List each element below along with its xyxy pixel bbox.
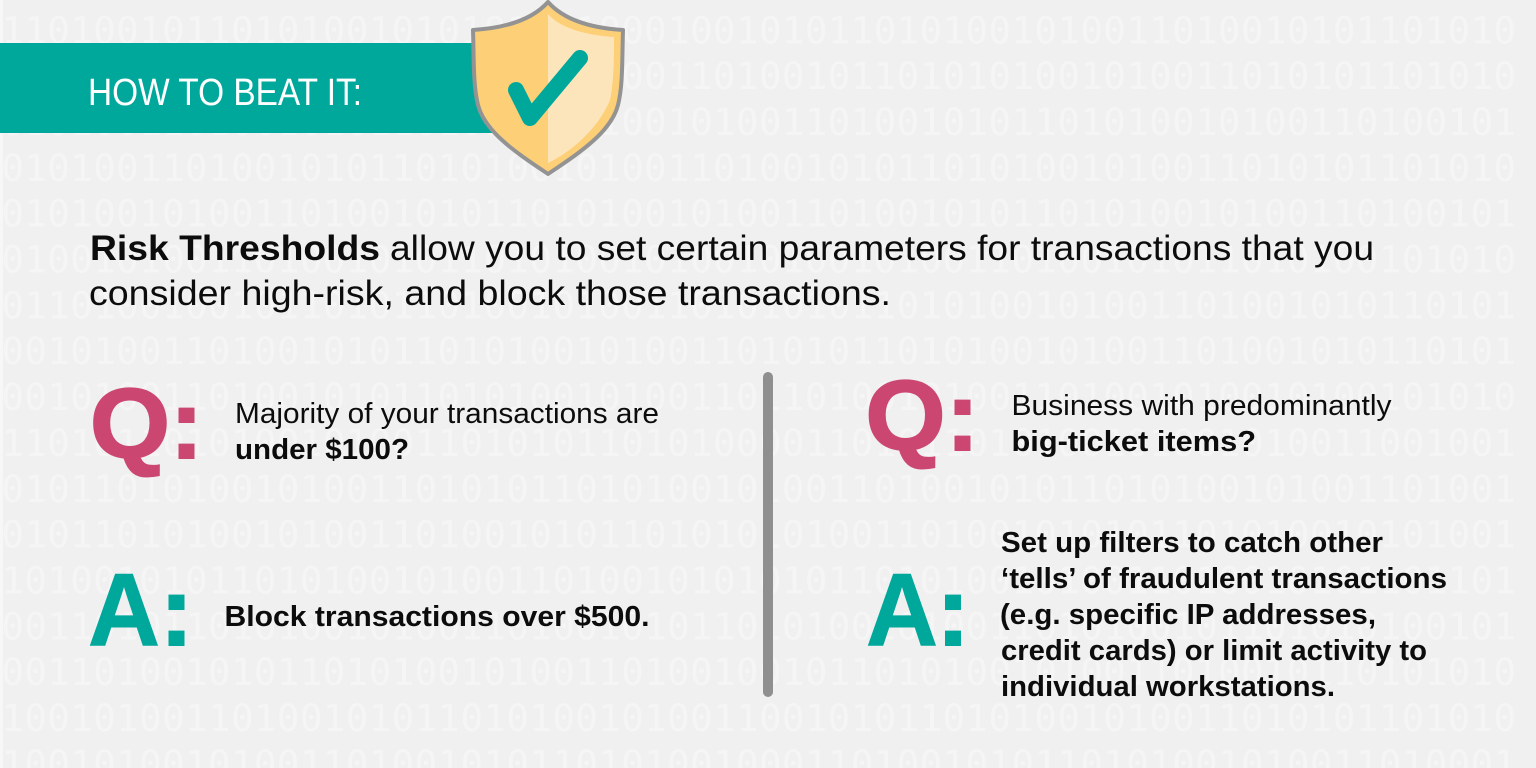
icon: A letter: : <box>160 557 193 666</box>
banner: how to beat it <box>0 43 500 133</box>
question text <box>1012 390 1392 458</box>
question text: big-ticket items? <box>1012 426 1256 458</box>
intro text: risk thresholds <box>89 229 1374 313</box>
icon: Q letter <box>866 360 979 471</box>
intro text: risk thresholds: Risk Thresholds <box>90 229 380 268</box>
background: binary digit pattern: 010110101001010011010101101010010100110100101011010100101001101001 <box>1 467 1516 511</box>
answer text <box>1000 527 1447 703</box>
panel: big-ticket question and answer <box>866 360 1447 703</box>
background: binary digit pattern: 110101101010010100110101011010100001101011010100101001010011001001 <box>1 421 1516 465</box>
background: binary digit pattern: 110100101101010010101010010001001010110101001010011010010101101010 <box>1 8 1516 52</box>
icon: Q letter: Q <box>90 368 170 478</box>
background: binary digit pattern: 100101001101001010110101001010011001010110101001010011010101101010 <box>1 696 1516 740</box>
answer text: ‘tells’ of fraudulent transactions <box>1001 563 1447 595</box>
icon: shield with check mark <box>473 2 623 174</box>
answer text: Set up filters to catch other <box>1001 527 1383 559</box>
icon: Q letter: : <box>946 362 979 471</box>
background: binary digit pattern: 010110101001010011010010101101010101001101001010101101010010101001 <box>1 513 1516 557</box>
icon: Q letter: : <box>170 370 203 479</box>
intro text: risk thresholds: consider high-risk, and block those transactions. <box>89 274 891 313</box>
answer text: individual workstations. <box>1001 671 1335 703</box>
icon: Q letter: Q <box>866 360 946 470</box>
background: binary digit pattern: 010100110100101011010100101001010011010010101101010010100110100101 <box>1 100 1516 144</box>
background: binary digit pattern: 001101011010100101001101001010110101001010011010100101101010100101 <box>1 604 1516 648</box>
answer text: credit cards) or limit activity to <box>1001 635 1427 667</box>
banner heading: HOW TO BEAT IT: <box>88 72 362 114</box>
intro text: risk thresholds: allow you to set certain parameters for transactions that you <box>390 229 1374 268</box>
background: binary digit pattern: 001101001010110101001010011010010010110101001010011010010110101010 <box>1 650 1516 694</box>
question text: Majority of your transactions are <box>235 398 659 430</box>
background: binary digit pattern: 001010011010010101101010010100110101011010100101001101001010110101 <box>1 329 1516 373</box>
icon: Q letter <box>90 368 203 479</box>
divider between columns <box>763 372 773 697</box>
question text <box>235 398 659 466</box>
question text: Business with predominantly <box>1012 390 1392 422</box>
background: binary digit pattern: 001010011010010101101010010100110110100101001101001010010100101010 <box>1 375 1516 419</box>
background: binary digit pattern: 010100101001101001010110101001010011010010101101010010100110100101 <box>1 192 1516 236</box>
answer text: (e.g. specific IP addresses, <box>1000 599 1376 631</box>
icon: A letter: A <box>866 552 938 667</box>
icon: A letter: A <box>88 552 160 667</box>
answer text: Block transactions over $500. <box>224 601 650 633</box>
background: binary digit pattern: 010100110100101011010100101001101001010110101001010011010101101010 <box>1 146 1516 190</box>
background: binary digit pattern: 101001010110101001010011010010101010110101001010011010010101101101 <box>1 558 1516 602</box>
background: binary digit pattern: 101001011010100101001101001001101001011010101001010011010101101010 <box>1 54 1516 98</box>
background: binary digit pattern: 010010100110100101011010100101001010010100110100101011010100101010 <box>1 238 1516 282</box>
panel: small transactions question and answer <box>88 368 659 667</box>
question text: under $100? <box>235 434 409 466</box>
background: binary digit pattern: 011010010010110101101001010011010101011010100101001101001010110101 <box>1 283 1516 327</box>
icon: A letter: : <box>936 557 970 666</box>
